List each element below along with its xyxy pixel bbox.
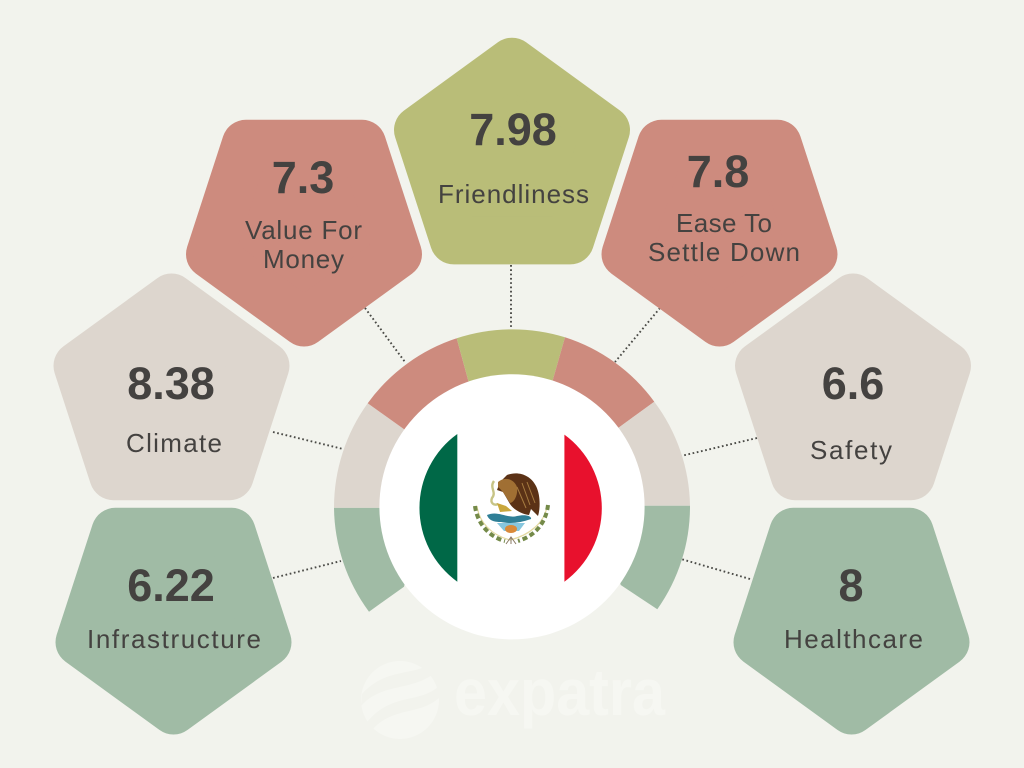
panel: friendliness: [418, 62, 606, 240]
ring chart: [334, 329, 690, 612]
panel: friendliness: 7.98: [469, 104, 557, 155]
connector lines: [273, 265, 757, 579]
panel: value for money: 7.3: [272, 152, 334, 203]
panel: safety: [759, 298, 947, 476]
panel: value for money: Value For: [245, 215, 362, 245]
panel: ease to settle down: Settle Down: [648, 237, 800, 267]
panel: healthcare: 8: [838, 560, 864, 611]
panel: ease to settle down: 7.8: [687, 146, 749, 197]
panel: ease to settle down: Ease To: [676, 208, 772, 238]
panel: climate: [78, 298, 266, 476]
panel: infrastructure: [80, 532, 268, 710]
watermark: expatra logo: [361, 655, 666, 739]
panel: climate: 8.38: [127, 358, 215, 409]
panel: infrastructure: 6.22: [127, 560, 215, 611]
panel: safety: Safety: [810, 435, 892, 465]
panel: friendliness: Friendliness: [438, 179, 589, 209]
icon: coat of arms: [475, 473, 548, 544]
center flag circle: [379, 374, 645, 639]
panel: safety: 6.6: [822, 358, 884, 409]
panel: ease to settle down: [626, 144, 814, 322]
panel: healthcare: Healthcare: [784, 624, 923, 654]
watermark: expatra logo: expatra: [454, 655, 666, 729]
panel: climate: Climate: [126, 428, 222, 458]
flag: green stripe: [419, 434, 457, 582]
panel: healthcare: [758, 532, 946, 710]
flag: red stripe: [564, 435, 602, 582]
panel: value for money: Money: [263, 244, 344, 274]
panel: value for money: [210, 144, 398, 322]
panel: infrastructure: Infrastructure: [87, 624, 261, 654]
